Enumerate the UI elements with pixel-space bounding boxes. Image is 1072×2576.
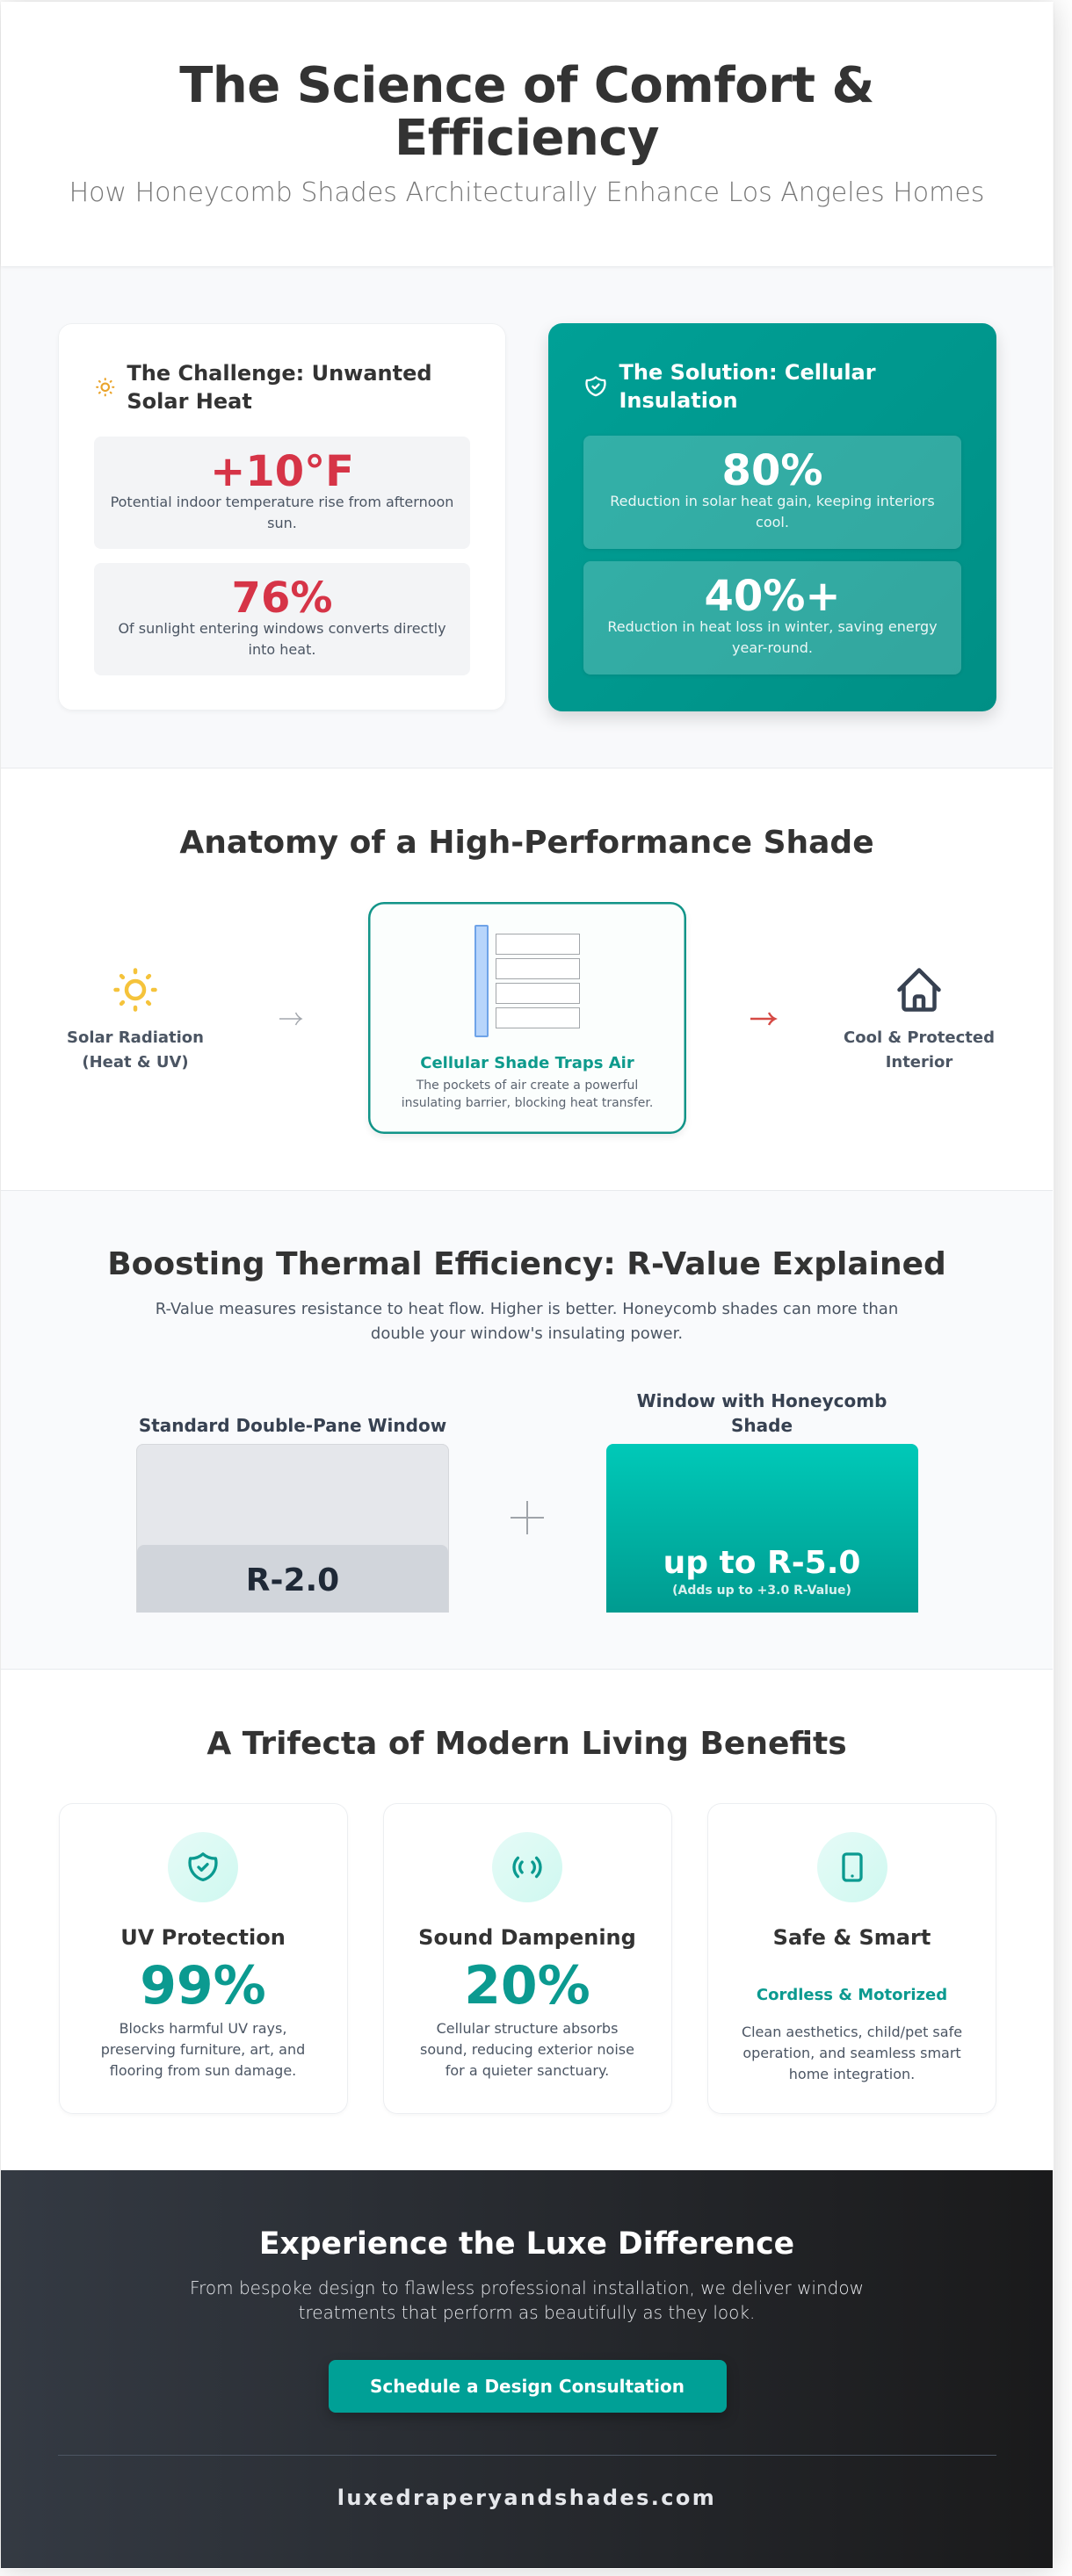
description [402,1079,653,1110]
step: solar radiation [67,968,204,1072]
intro text: R-Value measures resistance to heat flow. Higher is better. Honeycomb shades can more than [156,1300,898,1318]
stat description [118,620,446,658]
label: standard window: Standard Double-Pane Window [139,1415,446,1436]
footer heading: Experience the Luxe Difference [259,2226,794,2262]
heading: the challenge: Solar Heat [127,389,252,414]
heading: the solution: The Solution: Cellular [619,360,876,385]
icon: sun [113,968,157,1012]
panel: the solution [548,323,996,711]
diagram: air cells [496,934,580,1028]
card number: 99% [140,1955,266,2017]
icon: shield [585,376,606,397]
heading: r-value: Boosting Thermal Efficiency: R-Value Explained [107,1245,946,1282]
heading: anatomy: Anatomy of a High-Performance Shade [179,824,874,861]
label [844,1028,995,1072]
title: The Science of Comfort & [179,57,874,114]
icon: sound waves [492,1832,562,1902]
icon: sun [96,378,114,397]
label: Solar Radiation [67,1028,204,1047]
footer text: treatments that perform as beautifully as they look. [299,2302,755,2323]
panel: the challenge [58,323,506,711]
stat number: 40%+ [704,572,841,621]
stat number: +10°F [210,447,354,496]
stat: winter heat loss [583,561,961,675]
arrow: into shade [279,1012,302,1026]
heading: the solution: Insulation [619,388,738,413]
title [179,57,874,167]
card text: preserving furniture, art, and [101,2041,305,2058]
stat: temperature rise [94,437,470,549]
intro text [156,1300,898,1343]
card subtitle: Cordless & Motorized [757,1986,947,2004]
website: luxedraperyandshades.com [337,2486,716,2510]
card text [742,2024,962,2082]
icon: house [897,968,941,1012]
label: honeycomb window: Shade [731,1415,793,1436]
button: Schedule a Design Consultation [370,2376,684,2397]
step: cool interior [844,968,995,1072]
header [1,2,1053,266]
icon: phone [817,1832,887,1902]
card text [420,2020,634,2079]
icon: plus [511,1501,544,1534]
button [329,2360,726,2413]
card: uv protection [58,1803,348,2114]
stat description [607,618,938,656]
stat description: sun. [267,515,297,531]
footer text: From bespoke design to flawless professional installation, we deliver window [190,2277,864,2298]
card number: 20% [464,1955,590,2017]
label: honeycomb window [637,1390,887,1436]
label: Cellular Shade Traps Air [420,1054,634,1072]
footer call to action [1,2170,1053,2568]
section: challenge and solution [1,266,1053,768]
card title: Sound Dampening [418,1925,636,1950]
heading: the challenge: The Challenge: Unwanted [127,361,432,386]
stat description: Reduction in heat loss in winter, saving energy [607,618,938,635]
stat description: Of sunlight entering windows converts directly [118,620,446,637]
stat description: cool. [756,514,789,530]
diagram: glass pane [474,925,489,1037]
arrow: out to interior [750,1012,778,1026]
stat: sunlight converted [94,563,470,675]
stat description [111,494,453,531]
card text: for a quieter sanctuary. [445,2062,609,2079]
title: Efficiency [395,110,659,167]
section: benefits [1,1670,1053,2170]
bar: standard window [136,1444,449,1613]
label: honeycomb window: Window with Honeycomb [637,1390,887,1411]
bar: honeycomb window [606,1444,917,1613]
label: (Heat & UV) [82,1053,189,1072]
bar fill [137,1545,448,1613]
section: r-value [1,1191,1053,1670]
stat number: 76% [232,574,332,623]
heading: the solution [619,360,876,413]
stat: solar heat gain [583,436,961,548]
card text: home integration. [789,2066,915,2082]
stat description: year-round. [732,639,813,656]
card text: flooring from sun damage. [110,2062,296,2079]
card title: UV Protection [120,1925,286,1950]
icon: shield [168,1832,238,1902]
label: Interior [886,1053,952,1072]
r-value number: R-2.0 [246,1562,339,1598]
description: The pockets of air create a powerful [416,1079,638,1093]
r-value number: up to R-5.0 [663,1545,860,1581]
stat description [610,493,935,530]
heading: benefits: A Trifecta of Modern Living Benefits [206,1726,847,1762]
card: safe and smart [707,1803,996,2114]
description: insulating barrier, blocking heat transfer. [402,1096,653,1110]
card text: Cellular structure absorbs [437,2020,618,2037]
footer text [190,2277,864,2323]
label: Cool & Protected [844,1028,995,1047]
r-value note: (Adds up to +3.0 R-Value) [672,1584,851,1598]
card text: Blocks harmful UV rays, [120,2020,286,2037]
stat number: 80% [722,446,822,495]
section: anatomy [1,768,1053,1191]
card title: Safe & Smart [773,1925,931,1950]
subtitle: How Honeycomb Shades Architecturally Enhance Los Angeles Homes [69,177,984,208]
intro text: double your window's insulating power. [371,1324,683,1343]
stat description: Potential indoor temperature rise from afternoon [111,494,453,510]
card: sound dampening [383,1803,671,2114]
panel: cellular shade [368,902,686,1134]
stat description: Reduction in solar heat gain, keeping interiors [610,493,935,509]
card text: operation, and seamless smart [742,2045,961,2061]
heading: the challenge [127,361,432,414]
card text [101,2020,305,2079]
card text: Clean aesthetics, child/pet safe [742,2024,962,2040]
stat description: into heat. [249,641,315,658]
card text: sound, reducing exterior noise [420,2041,634,2058]
label [67,1028,204,1072]
